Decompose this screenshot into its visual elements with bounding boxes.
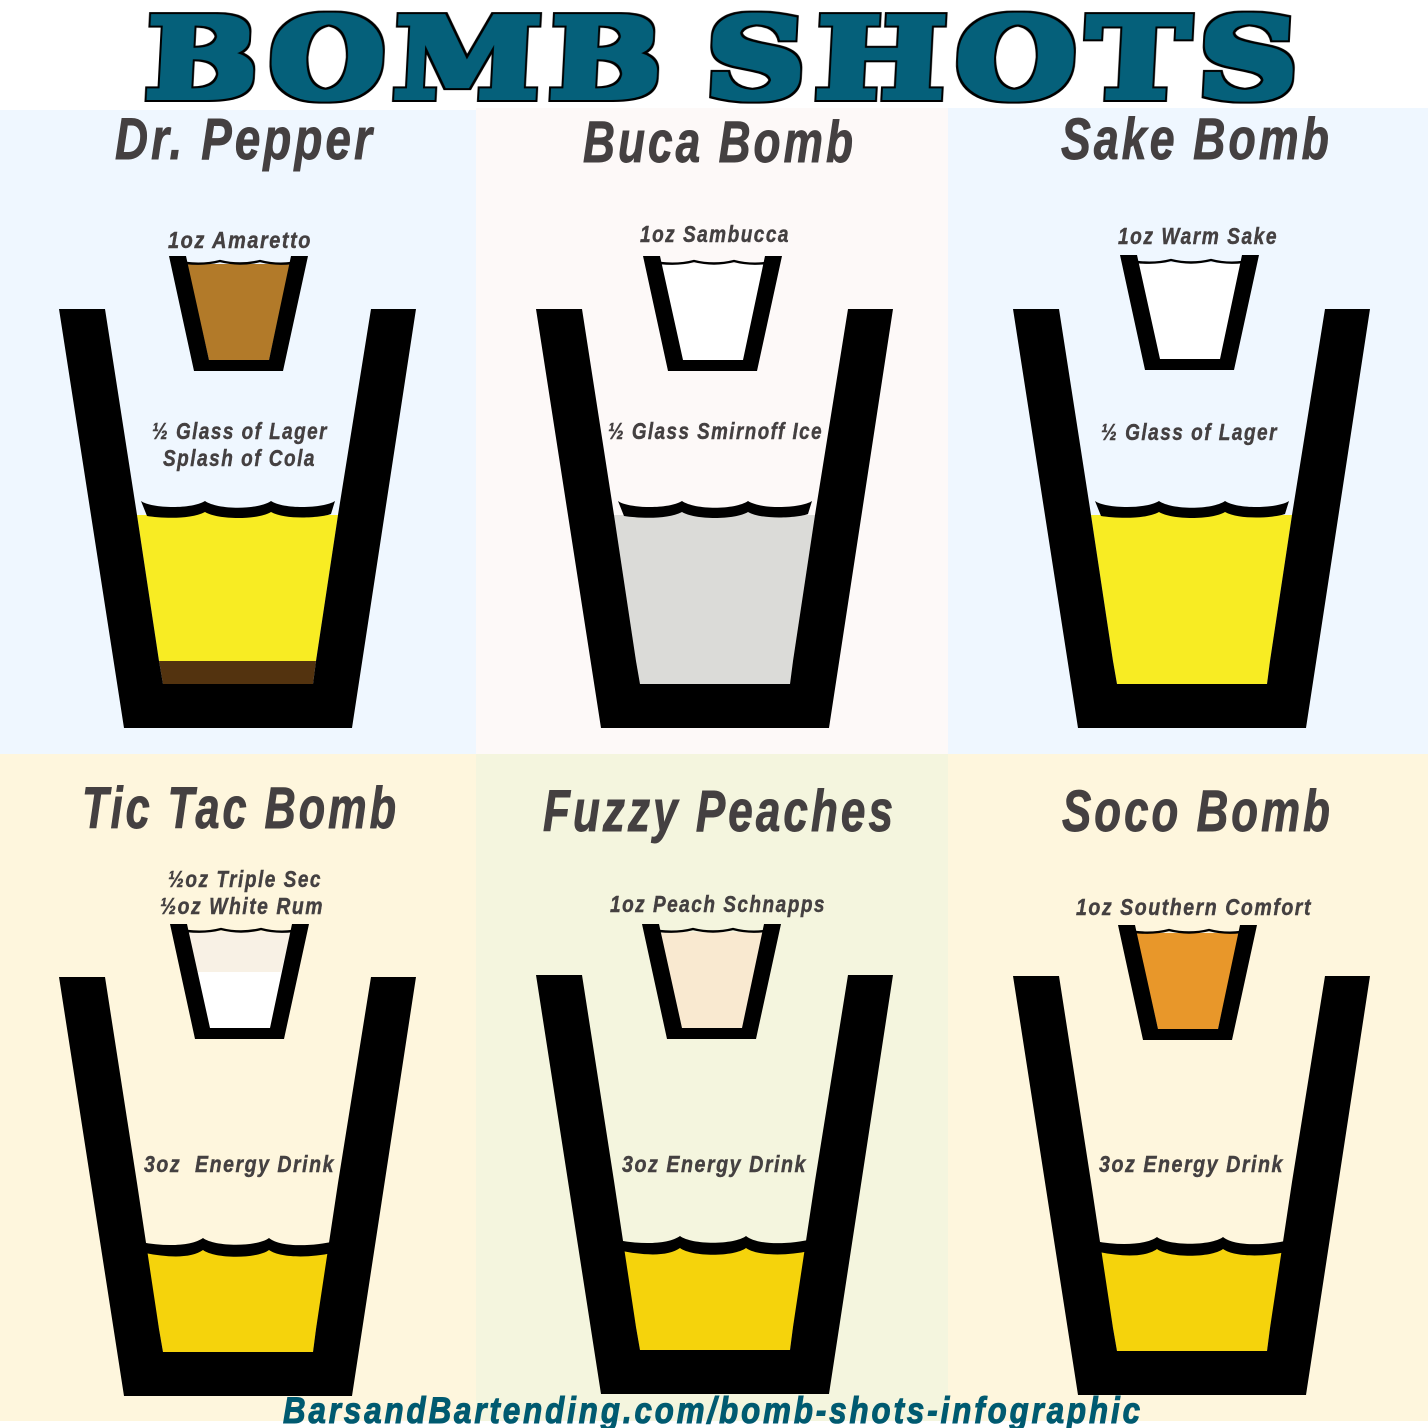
drink: Tic Tac Bomb xyxy=(59,776,416,1396)
panel: Fuzzy Peaches background xyxy=(476,754,948,1421)
shot label: 1oz Sambucca xyxy=(640,221,790,247)
glass label: Splash of Cola xyxy=(163,445,316,471)
heading: Sake Bomb xyxy=(1061,107,1332,172)
drink: Sake Bomb xyxy=(1013,107,1370,728)
shot glass with Southern Comfort xyxy=(1118,925,1257,1040)
pint glass with energy drink xyxy=(59,977,416,1396)
heading: Tic Tac Bomb xyxy=(82,776,399,841)
panel: Tic Tac Bomb background xyxy=(0,754,476,1421)
shot label: 1oz Southern Comfort xyxy=(1076,894,1312,920)
shot glass with amaretto xyxy=(169,256,308,371)
shot label: 1oz Peach Schnapps xyxy=(610,891,826,917)
shot glass with triple sec and white rum xyxy=(170,924,309,1039)
heading: Soco Bomb xyxy=(1062,779,1333,844)
pint glass with lager and cola xyxy=(59,309,416,728)
shot glass with sake xyxy=(1120,255,1259,370)
panel: Sake Bomb background xyxy=(948,108,1428,754)
glass label: 3oz Energy Drink xyxy=(144,1151,335,1177)
panel: Dr. Pepper background xyxy=(0,110,476,754)
drink: Dr. Pepper xyxy=(59,107,416,728)
glass label: ½ Glass Smirnoff Ice xyxy=(608,418,823,444)
shot glass with peach schnapps xyxy=(642,924,781,1039)
pint glass with energy drink xyxy=(1013,976,1370,1395)
shot label: 1oz Amaretto xyxy=(168,227,312,253)
shot label xyxy=(160,866,324,919)
shot label: 1oz Warm Sake xyxy=(1118,223,1278,249)
pint glass with lager xyxy=(1013,309,1370,728)
shot label: ½oz Triple Sec xyxy=(168,866,322,892)
drink: Soco Bomb xyxy=(1013,779,1370,1395)
title xyxy=(143,0,1311,124)
glass label: 3oz Energy Drink xyxy=(1099,1151,1284,1177)
glass label xyxy=(152,418,328,471)
glass label: ½ Glass of Lager xyxy=(152,418,328,444)
shot label: ½oz White Rum xyxy=(160,893,324,919)
panel: Soco Bomb background xyxy=(948,754,1428,1421)
glass label: ½ Glass of Lager xyxy=(1101,419,1278,445)
heading: Fuzzy Peaches xyxy=(543,779,896,844)
glass label: 3oz Energy Drink xyxy=(622,1151,807,1177)
pint glass with energy drink xyxy=(536,975,893,1394)
shot glass with sambuca xyxy=(643,256,782,371)
pint glass with Smirnoff Ice xyxy=(536,309,893,728)
panel: Buca Bomb background xyxy=(476,108,948,754)
heading: Buca Bomb xyxy=(583,110,856,175)
drink: Fuzzy Peaches xyxy=(536,779,896,1394)
drink: Buca Bomb xyxy=(536,110,893,728)
heading: Dr. Pepper xyxy=(115,107,375,172)
